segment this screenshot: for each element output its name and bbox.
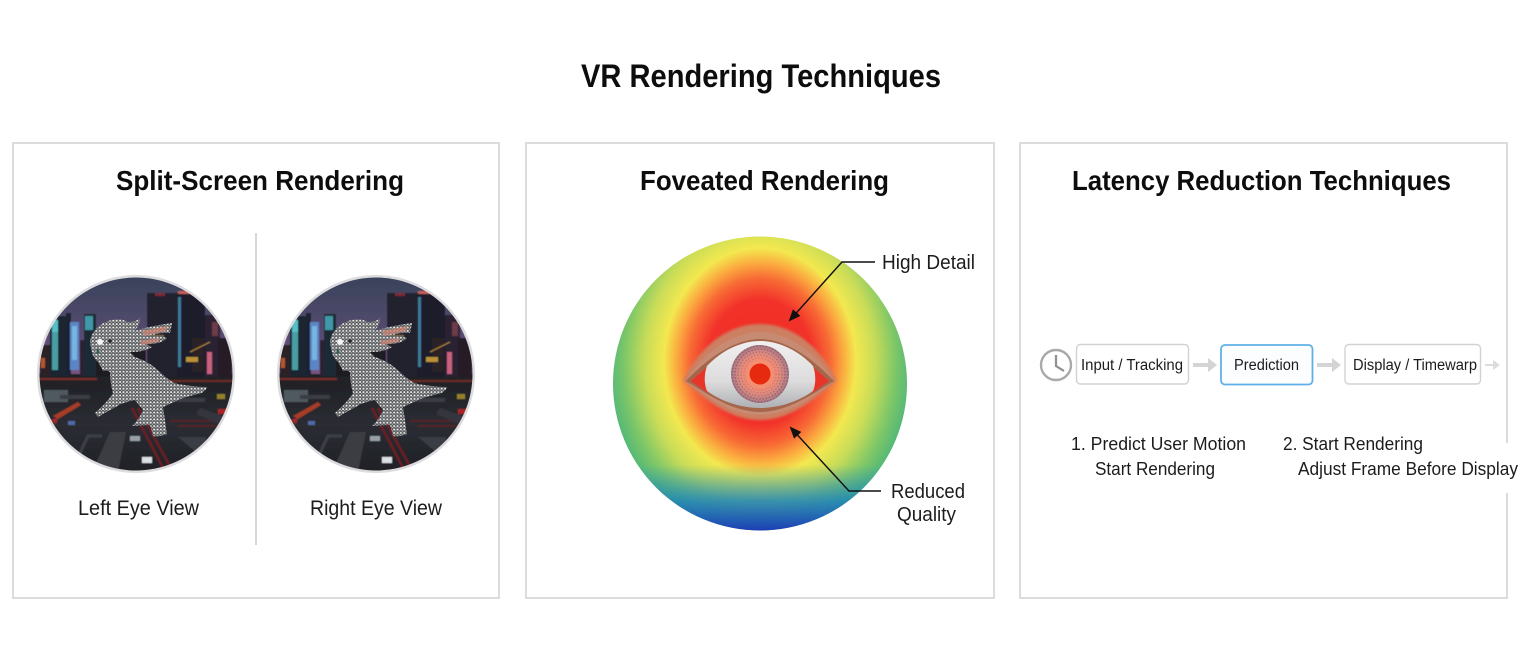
flow step: display / timewarp: Display / Timewarp — [1353, 357, 1477, 374]
icon: eye — [683, 324, 837, 420]
panel: latency reduction techniques — [1020, 143, 1518, 598]
flow step: display / timewarp — [1345, 344, 1480, 384]
title: VR Rendering Techniques — [581, 58, 941, 94]
step text 1: 1. Predict User Motion — [1071, 434, 1246, 454]
step text 1: Start Rendering — [1095, 459, 1215, 479]
label: left eye view: Left Eye View — [78, 497, 200, 520]
step text 2: 2. Start Rendering — [1283, 434, 1423, 454]
divider between eye views — [255, 233, 257, 545]
callout: high detail: High Detail — [882, 252, 975, 274]
arrow: prediction to display — [1317, 358, 1341, 372]
panel: foveated rendering — [526, 143, 994, 598]
callout: reduced quality: Quality — [897, 504, 956, 526]
panel: split-screen rendering — [13, 143, 499, 598]
foveation heat map — [613, 236, 907, 530]
left eye view image — [37, 275, 235, 476]
step text 1 — [1071, 434, 1246, 479]
flow step: input / tracking — [1076, 344, 1188, 384]
flow step: input / tracking: Input / Tracking — [1081, 357, 1183, 374]
callout: reduced quality: Reduced — [891, 481, 965, 503]
heading: latency reduction techniques: Latency Reduction Techniques — [1072, 165, 1451, 196]
label: right eye view: Right Eye View — [310, 497, 443, 520]
right eye view image — [277, 275, 475, 476]
icon: clock — [1041, 350, 1071, 380]
callout: high detail — [790, 252, 975, 320]
flow step: prediction — [1221, 345, 1312, 384]
heading: foveated rendering: Foveated Rendering — [640, 165, 889, 196]
step text 2 — [1283, 434, 1518, 479]
arrow: display onward — [1485, 360, 1500, 370]
flow step: prediction: Prediction — [1234, 357, 1299, 374]
heading: split-screen rendering: Split-Screen Rendering — [116, 165, 404, 196]
step text 2: Adjust Frame Before Display — [1298, 459, 1518, 479]
arrow: input to prediction — [1193, 358, 1217, 372]
callout: reduced quality — [791, 428, 965, 526]
